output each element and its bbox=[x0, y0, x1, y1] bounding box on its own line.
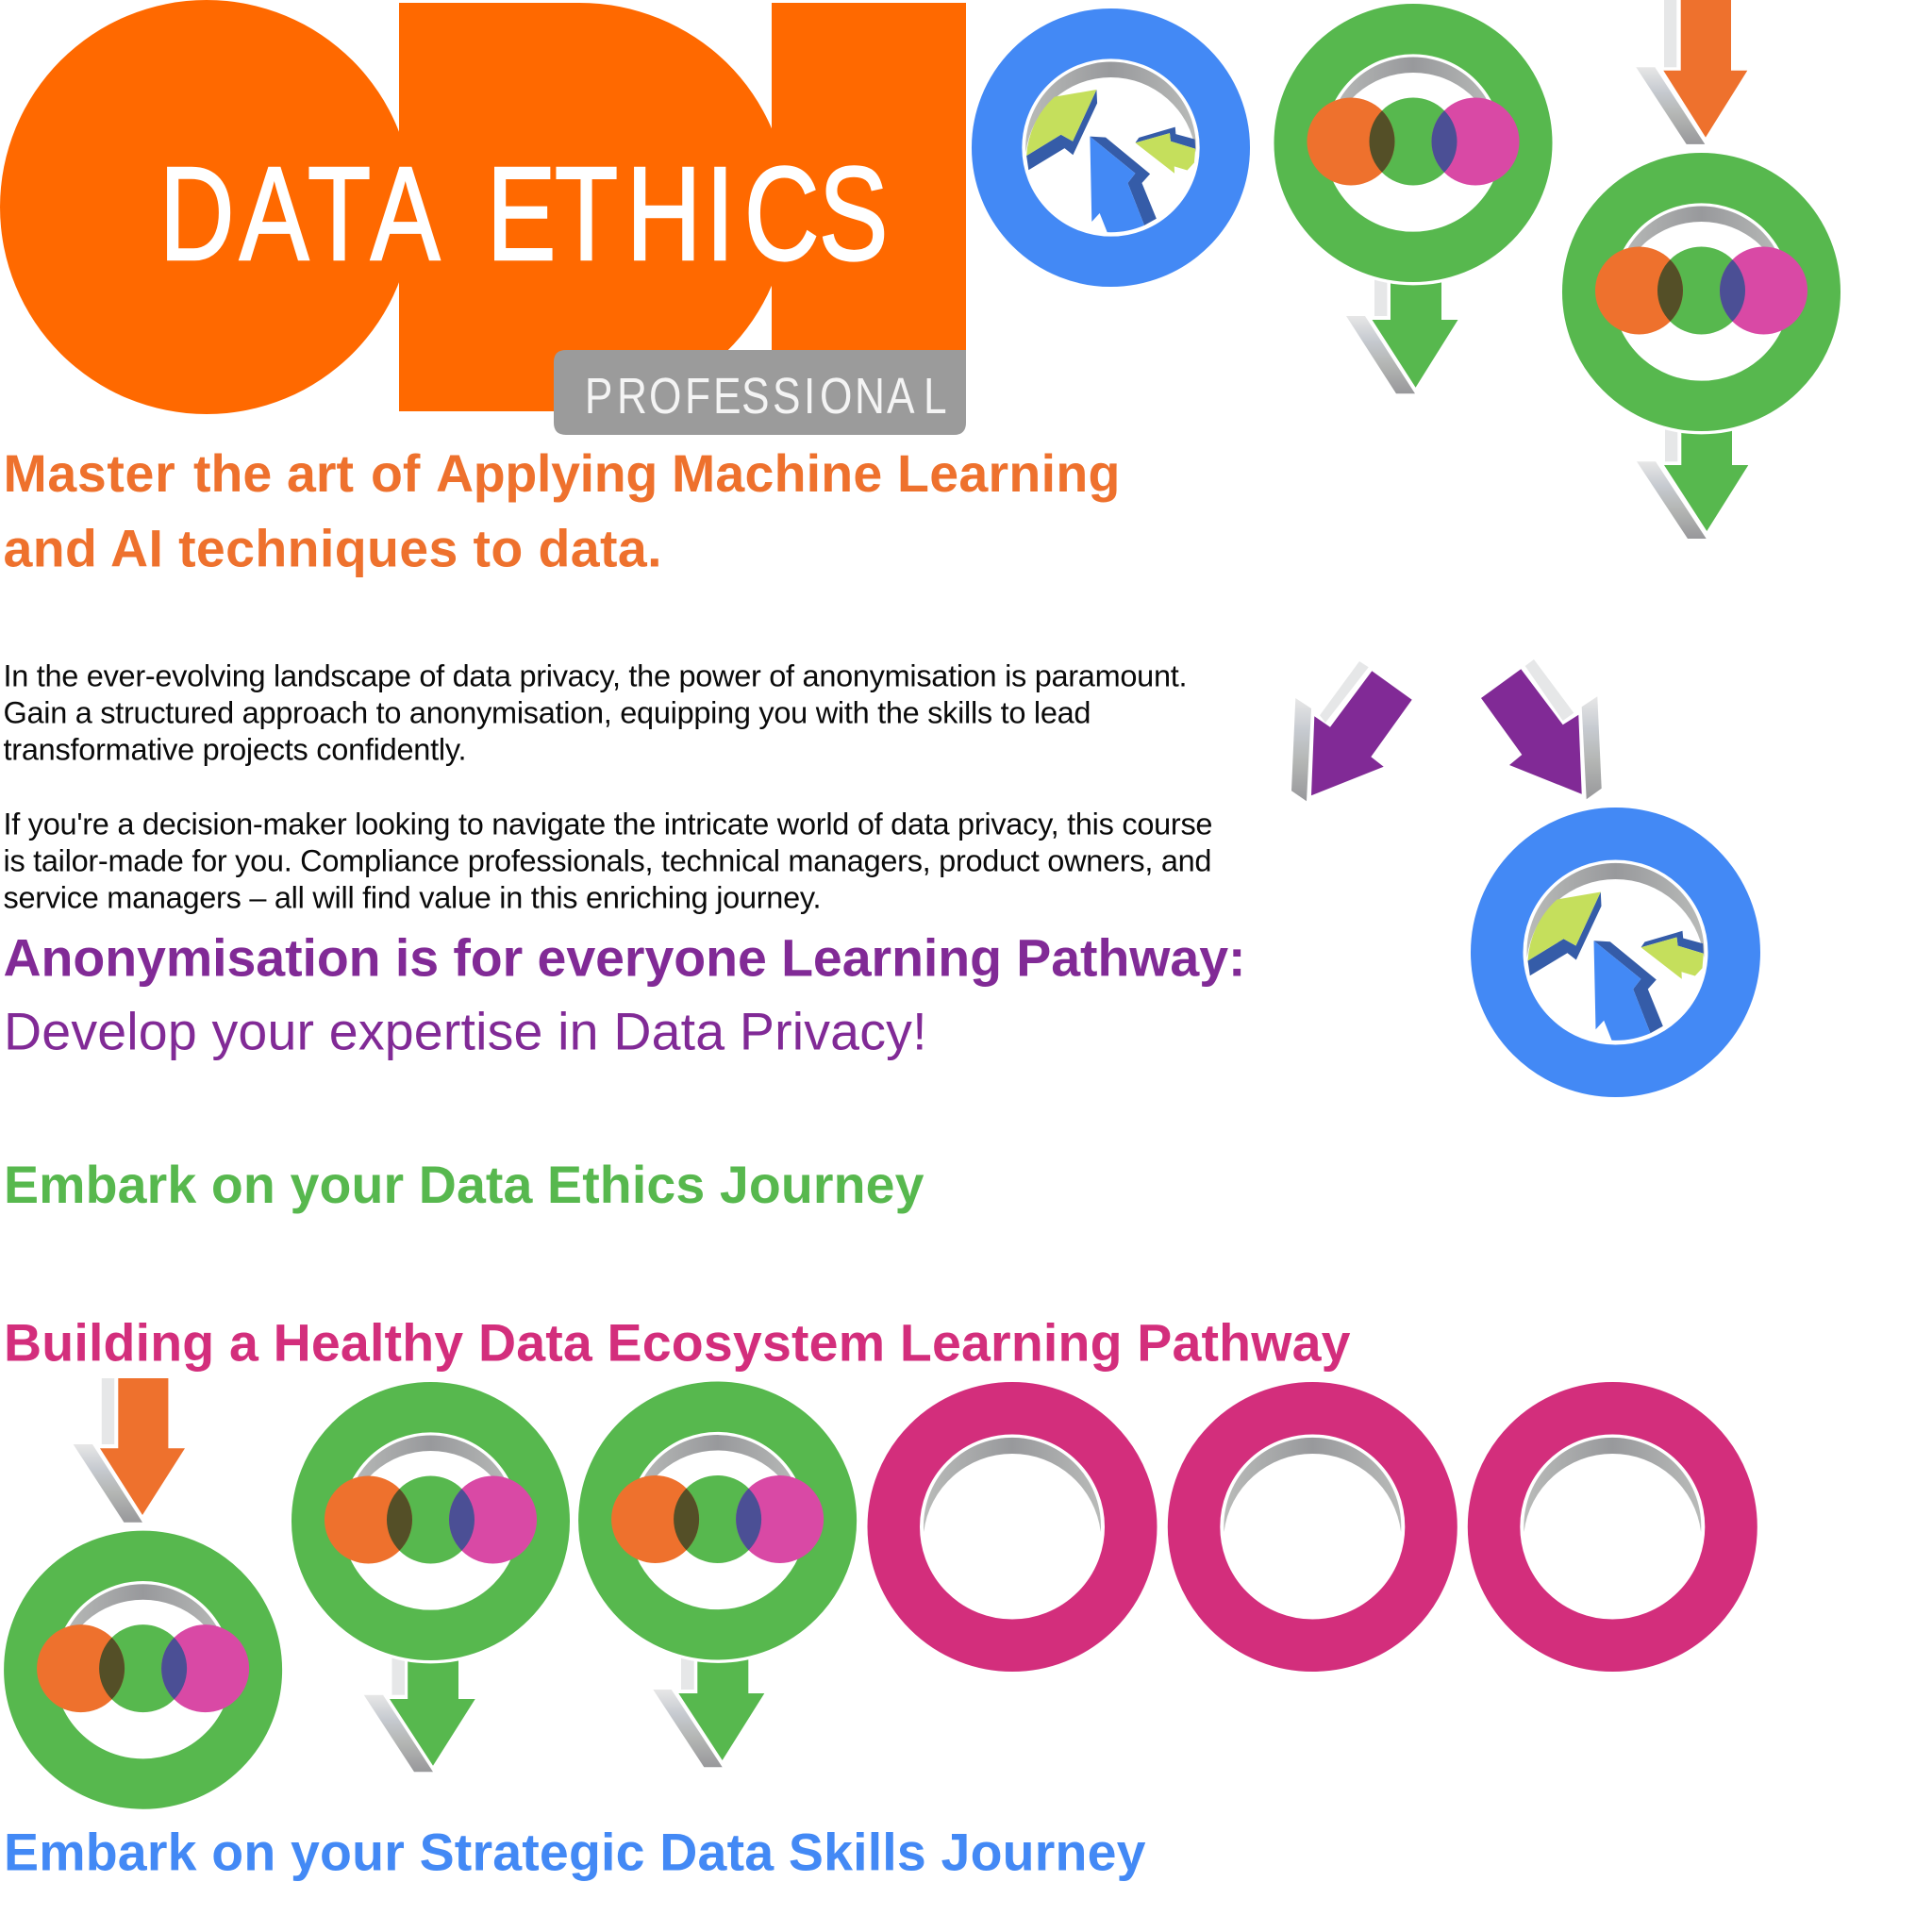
icon: green venn ring, bottom third bbox=[575, 1378, 859, 1663]
heading: master the art: art bbox=[287, 444, 354, 503]
text block: introduction: In the ever-evolving landscape of data privacy, the power of anonymisation is paramount. bbox=[4, 659, 1187, 693]
arrow: purple down-left bbox=[1291, 661, 1412, 801]
arrow: orange bottom left bbox=[74, 1378, 185, 1523]
professional label: PROFESSIONAL bbox=[585, 368, 947, 425]
icon: green venn ring, bottom left bbox=[1, 1527, 285, 1812]
professional badge bbox=[554, 350, 966, 435]
text block: introduction: Gain a structured approach to anonymisation, equipping you with the skills to lead bbox=[4, 696, 1091, 730]
subheading: develop your expertise: Develop your expertise in Data Privacy! bbox=[4, 1003, 926, 1061]
text block: audience bbox=[4, 807, 1213, 914]
heading: master the art: Learning bbox=[897, 444, 1121, 503]
icon: pink ring one bbox=[893, 1408, 1131, 1645]
arrow: purple down-right bbox=[1481, 659, 1602, 799]
logo shape: orange D bbox=[399, 3, 788, 411]
heading: healthy data ecosystem pathway: Building a Healthy Data Ecosystem Learning Pathway bbox=[4, 1313, 1351, 1372]
text block: audience: If you're a decision-maker looking to navigate the intricate world of data privacy, this course bbox=[4, 807, 1213, 841]
arrow: green under third bottom ring bbox=[653, 1656, 764, 1767]
icon: blue ring with cursors, top bbox=[969, 6, 1253, 290]
icon: pink ring two bbox=[1194, 1408, 1431, 1645]
arrow: orange top right bbox=[1636, 0, 1747, 144]
icon: green venn ring, top bbox=[1271, 1, 1556, 285]
heading: master the art: and AI techniques to data. bbox=[4, 520, 662, 578]
text block: audience: service managers – all will find value in this enriching journey. bbox=[4, 880, 821, 914]
heading: master the art: Machine bbox=[672, 444, 882, 503]
icon: green venn ring, top right bbox=[1559, 150, 1843, 434]
heading: anonymisation pathway: Anonymisation is for everyone Learning Pathway: bbox=[4, 928, 1245, 987]
icon: pink ring three bbox=[1494, 1408, 1731, 1645]
text block: introduction bbox=[4, 659, 1187, 767]
logo title: DATA ETHICS bbox=[159, 140, 888, 288]
arrow: green under top ring bbox=[1346, 278, 1458, 393]
heading: master the art: Master bbox=[4, 444, 175, 503]
heading: master the art: the bbox=[193, 444, 272, 503]
heading: master the art: Applying bbox=[436, 444, 658, 503]
text block: audience: is tailor-made for you. Compliance professionals, technical managers, product owners, and bbox=[4, 843, 1211, 877]
text block: introduction: transformative projects confidently. bbox=[4, 733, 466, 767]
heading: master the art bbox=[4, 444, 1121, 578]
heading: master the art: of bbox=[371, 444, 421, 503]
arrow: green under right ring bbox=[1637, 425, 1748, 539]
logo shape: orange I block bbox=[772, 3, 966, 352]
arrow: green under second bottom ring bbox=[364, 1656, 475, 1772]
heading: strategic data skills journey: Embark on your Strategic Data Skills Journey bbox=[4, 1823, 1146, 1881]
heading: data ethics journey: Embark on your Data Ethics Journey bbox=[4, 1156, 924, 1214]
icon: green venn ring, bottom second bbox=[289, 1379, 573, 1663]
icon: blue ring with cursors, middle bbox=[1468, 804, 1764, 1100]
logo: Data Ethics Professional bbox=[0, 0, 966, 435]
logo shape: orange circle bbox=[0, 0, 413, 414]
